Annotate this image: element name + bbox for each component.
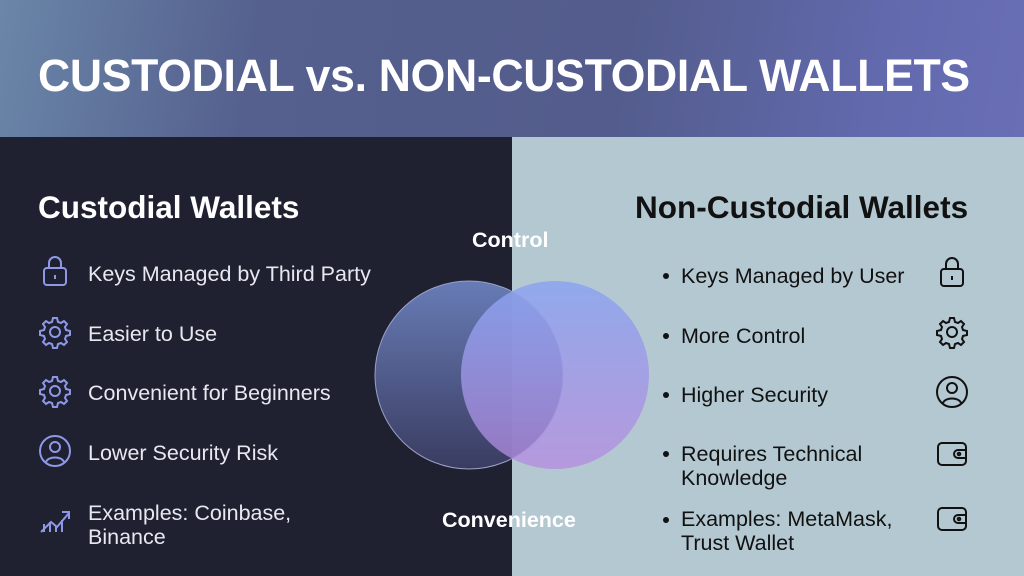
icon: chart — [40, 511, 70, 533]
text: keys managed by user: Keys Managed by User — [681, 264, 904, 288]
icon: gear 2 — [39, 376, 71, 408]
text: more control: More Control — [681, 324, 805, 348]
text: examples custodial: Examples: Coinbase, — [88, 501, 291, 525]
bullet 2 — [663, 333, 669, 339]
icon: user right — [936, 376, 968, 408]
icon: wallet 2 — [937, 507, 967, 531]
label: control: Control — [472, 228, 548, 252]
title: CUSTODIAL vs. NON-CUSTODIAL WALLETS — [38, 50, 970, 101]
icon: gear — [39, 317, 71, 349]
text: easier to use: Easier to Use — [88, 322, 217, 346]
icon: lock right — [940, 257, 964, 287]
text: examples custodial — [88, 501, 291, 549]
label: convenience: Convenience — [442, 508, 576, 532]
bullet 3 — [663, 392, 669, 398]
circle: custodial — [375, 281, 563, 469]
text: keys third party: Keys Managed by Third Party — [88, 262, 371, 286]
panel: custodial — [0, 137, 512, 576]
heading: non-custodial wallets: Non-Custodial Wallets — [635, 189, 968, 225]
icon: gear right — [936, 317, 968, 349]
bullet 4 — [663, 451, 669, 457]
header banner — [0, 0, 1024, 137]
text: examples non-custodial — [681, 507, 892, 555]
bullet 5 — [663, 517, 669, 523]
text: requires technical knowledge — [681, 442, 862, 490]
icon: user — [39, 435, 71, 467]
text: examples custodial: Binance — [88, 525, 166, 549]
text: examples non-custodial: Trust Wallet — [681, 531, 794, 555]
panel: non-custodial — [512, 137, 1024, 576]
text: requires technical knowledge: Knowledge — [681, 466, 787, 490]
icon: wallet — [937, 442, 967, 466]
text: convenient for beginners: Convenient for Beginners — [88, 381, 331, 405]
text: higher security: Higher Security — [681, 383, 828, 407]
text: examples non-custodial: Examples: MetaMask, — [681, 507, 892, 531]
icon: lock — [43, 256, 67, 286]
bullet 1 — [663, 273, 669, 279]
heading: custodial wallets: Custodial Wallets — [38, 189, 299, 225]
text: requires technical knowledge: Requires Technical — [681, 442, 862, 466]
text: lower security risk: Lower Security Risk — [88, 441, 278, 465]
circle: non-custodial — [461, 281, 649, 469]
